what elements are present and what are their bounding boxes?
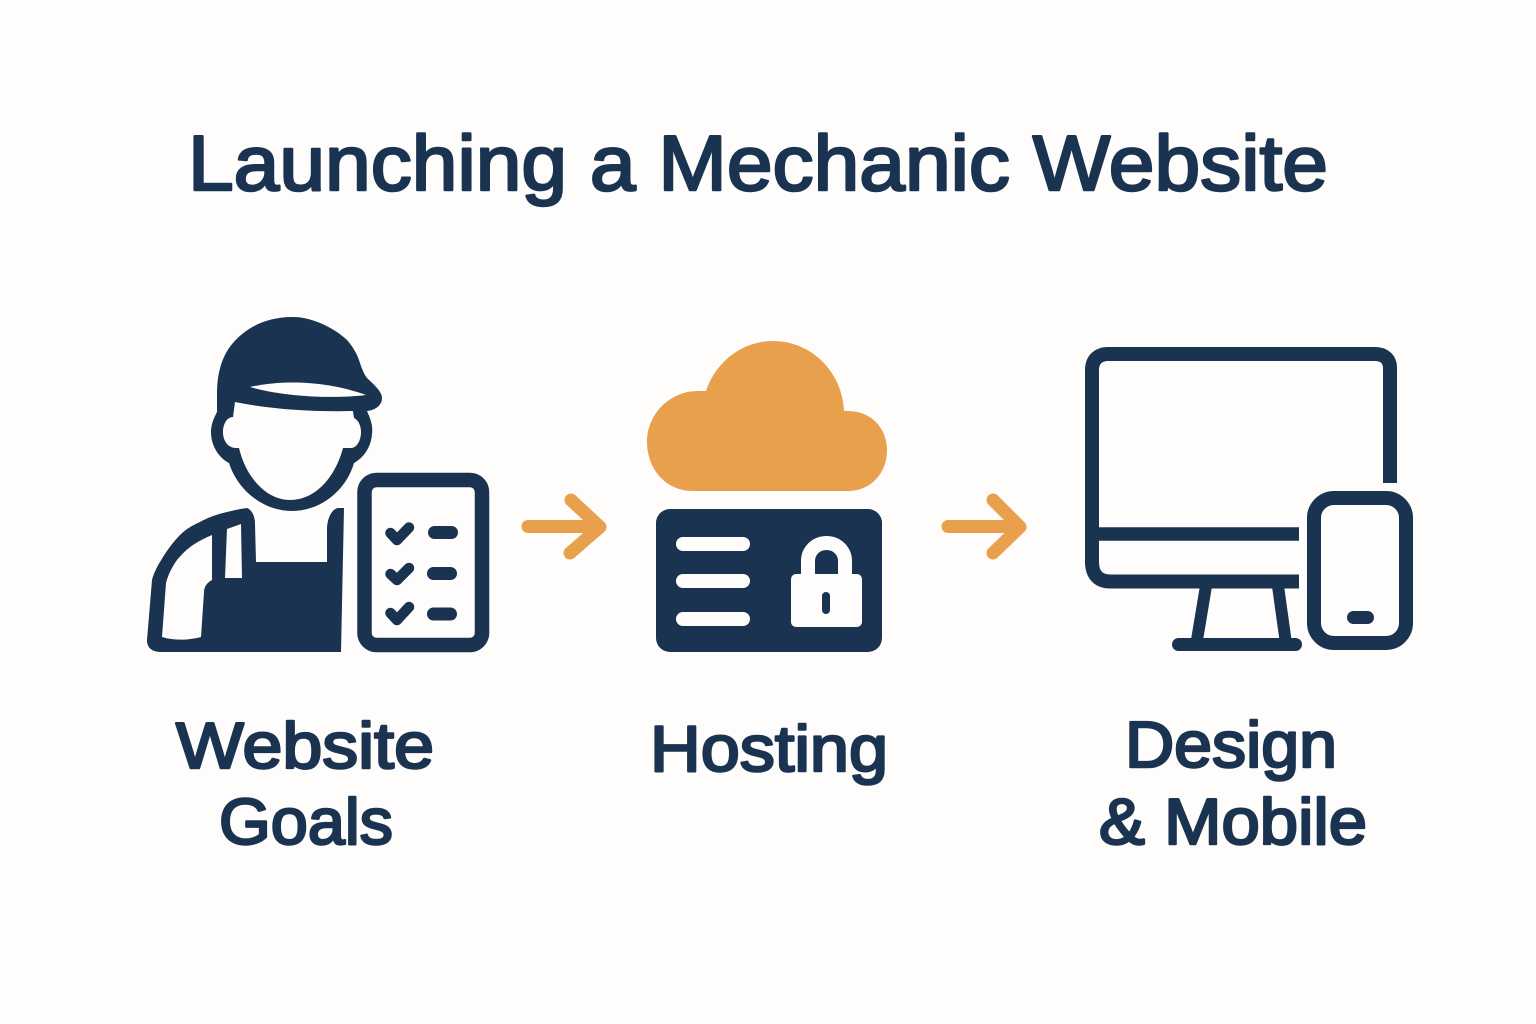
face and ears (223, 402, 361, 500)
mechanic overalls (147, 508, 344, 652)
icon: mechanic with checklist (147, 317, 482, 652)
label: website goals: Goals (219, 785, 393, 858)
icon: desktop and mobile (1092, 354, 1406, 651)
checklist clipboard (364, 480, 482, 645)
phone button (1347, 611, 1374, 624)
monitor frame (1092, 354, 1390, 582)
icon: cloud hosting (647, 341, 887, 652)
server panel (656, 509, 882, 652)
cap highlight (250, 382, 366, 397)
checklist row 1 (390, 528, 452, 540)
phone (1314, 498, 1406, 643)
label: design and mobile: Design (1125, 708, 1337, 781)
checklist row 3 (390, 607, 450, 620)
server lines (676, 537, 750, 626)
arrow: goals to hosting (528, 500, 600, 553)
label: hosting: Hosting (650, 712, 888, 785)
checklist row 2 (390, 568, 450, 580)
label: design and mobile (1099, 708, 1367, 858)
label: website goals: Website (176, 709, 434, 782)
monitor stand (1197, 586, 1286, 640)
cloud (647, 341, 887, 491)
arrow: hosting to design (948, 500, 1020, 553)
mechanic cap and head outline (211, 317, 382, 511)
title: Launching a Mechanic Website (188, 119, 1328, 207)
label: website goals (176, 709, 434, 858)
monitor base (1172, 638, 1302, 651)
monitor chin line (1092, 527, 1299, 541)
padlock (791, 543, 862, 627)
label: design and mobile: & Mobile (1099, 785, 1367, 858)
